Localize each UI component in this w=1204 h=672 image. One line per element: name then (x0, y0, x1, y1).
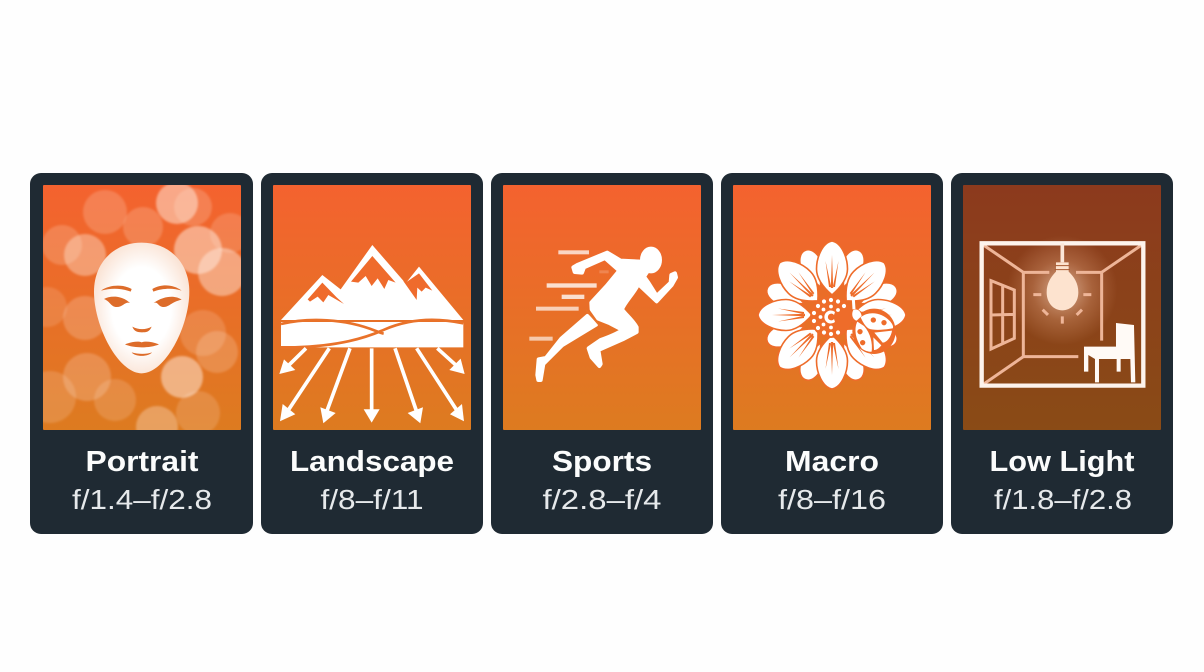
bokeh lights (43, 185, 241, 430)
icon: mountains with deep focus arrows (279, 245, 465, 423)
card: Low Light (951, 173, 1173, 534)
title: Landscape: Landscape (290, 446, 454, 478)
card: Macro (721, 173, 943, 534)
card: Sports (491, 173, 713, 534)
icon: sprinter (529, 249, 676, 380)
aperture: Low Light: f/1.8–f/2.8 (994, 484, 1132, 515)
image panel: macro background (733, 185, 931, 430)
title: Portrait: Portrait (86, 446, 199, 478)
title: Macro: Macro (785, 446, 879, 478)
title: Sports: Sports (552, 446, 652, 478)
bulb glow (1007, 235, 1117, 345)
aperture: Portrait: f/1.4–f/2.8 (72, 484, 212, 515)
ladybug (850, 299, 896, 354)
image panel: landscape background (273, 185, 471, 430)
motion streaks (529, 250, 609, 341)
image panel: portrait background (43, 185, 241, 430)
image panel: sports background (503, 185, 701, 430)
flower centre (810, 296, 852, 338)
card: Portrait (24, 173, 253, 534)
card: Landscape (261, 173, 483, 534)
aperture: Macro: f/8–f/16 (778, 484, 886, 515)
title: Low Light: Low Light (990, 446, 1135, 478)
image panel: low light background (963, 185, 1161, 430)
light bulb (1047, 262, 1078, 310)
aperture: Sports: f/2.8–f/4 (542, 484, 662, 515)
icon: flower with ladybug (758, 241, 906, 389)
aperture: Landscape: f/8–f/11 (320, 484, 424, 515)
icon: face (94, 243, 189, 373)
icon: dim room with bulb (982, 235, 1143, 386)
chair (1084, 323, 1135, 382)
petals (758, 241, 906, 389)
